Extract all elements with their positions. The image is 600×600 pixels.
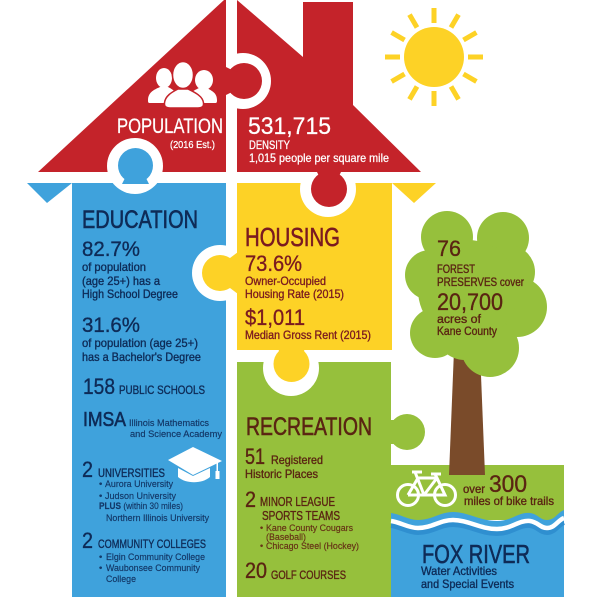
text: recreation: Kane County Cougars: [266, 523, 353, 533]
text: housing: $1,011: [245, 305, 305, 330]
text: education: 31.6%: [82, 314, 140, 337]
text: education: •: [99, 479, 102, 490]
panel: housing: [202, 161, 436, 382]
text: education: 2: [82, 528, 93, 553]
text: housing: [245, 222, 371, 342]
text: education: •: [99, 552, 102, 563]
text: education: 82.7%: [82, 238, 140, 261]
text: forest preserves: 20,700: [437, 289, 503, 316]
text: education: IMSA: [83, 409, 127, 431]
tree trunk: [449, 350, 485, 475]
text: education: Illinois Mathematics: [129, 418, 210, 428]
text: forest preserves: FOREST: [437, 264, 475, 276]
panel: fox river water: [391, 510, 564, 597]
text: density: 531,715: [248, 113, 331, 140]
text: bike trails: [463, 471, 554, 508]
text: recreation: MINOR LEAGUE: [260, 495, 335, 509]
text: fox river: [421, 539, 530, 591]
text: density: DENSITY: [249, 138, 290, 152]
text: housing: HOUSING: [245, 222, 340, 252]
icon: bicycle: [398, 472, 456, 506]
text: recreation: Historic Places: [245, 467, 318, 481]
text: education: (age 25+) has a: [82, 274, 160, 288]
text: housing: Housing Rate (2015): [245, 287, 344, 301]
text: education: Aurora University: [105, 479, 173, 490]
panel: bike trails ground: [391, 465, 564, 520]
text: recreation: GOLF COURSES: [271, 568, 346, 582]
text: forest preserves: 76: [437, 236, 461, 261]
text: education: High School Degree: [82, 287, 178, 301]
text: fox river: FOX RIVER: [422, 539, 530, 569]
panel: density roof right: [215, 0, 421, 172]
text: bike trails: 300: [489, 471, 527, 498]
text: education: and Science Academy: [130, 429, 223, 439]
icon: graduation cap: [168, 447, 222, 482]
text: education: College: [106, 574, 136, 585]
text: recreation: Registered: [271, 453, 323, 467]
panel: recreation: [237, 340, 425, 597]
text: education: •: [99, 563, 102, 574]
text: housing: Median Gross Rent (2015): [245, 328, 371, 342]
text: recreation: 2: [245, 487, 256, 512]
text: education: PLUS (within 30 miles): [99, 501, 183, 512]
text: recreation: 51: [245, 444, 265, 469]
text: forest preserves: [437, 236, 524, 338]
blue knob into population: [118, 148, 153, 184]
text: recreation: •: [260, 523, 263, 533]
text: recreation: Chicago Steel (Hockey): [266, 541, 359, 551]
icon: people: [148, 62, 217, 108]
text: bike trails: miles of bike trails: [464, 494, 554, 508]
text: education: [82, 206, 223, 585]
text: forest preserves: acres of: [437, 314, 482, 326]
text: education: 158: [83, 374, 115, 399]
text: density: [248, 113, 389, 165]
text: education: Elgin Community College: [106, 552, 205, 563]
text: bike trails: over: [463, 482, 485, 496]
text: education: 2: [82, 457, 93, 482]
text: education: COMMUNITY COLLEGES: [98, 537, 206, 551]
text: population: (2016 Est.): [170, 140, 215, 151]
text: education: of population: [82, 260, 146, 274]
text: population: [117, 115, 223, 151]
text: education: PUBLIC SCHOOLS: [119, 383, 205, 397]
text: forest preserves: PRESERVES cover: [437, 277, 524, 289]
text: education: has a Bachelor's Degree: [82, 350, 201, 364]
text: education: EDUCATION: [82, 206, 198, 234]
text: education: Judson University: [105, 491, 176, 502]
text: recreation: 20: [245, 558, 267, 583]
tree canopy: [405, 211, 547, 377]
text: recreation: RECREATION: [246, 413, 372, 441]
text: housing: 73.6%: [245, 251, 302, 276]
text: fox river: and Special Events: [421, 577, 514, 591]
text: forest preserves: Kane County: [437, 326, 497, 338]
text: education: Waubonsee Community: [106, 563, 200, 574]
panel: education: [27, 183, 248, 597]
text: education: •: [99, 491, 102, 502]
text: education: Northern Illinois University: [106, 513, 209, 524]
text: density: 1,015 people per square mile: [249, 151, 389, 165]
icon: sun: [385, 8, 483, 106]
text: recreation: •: [260, 541, 263, 551]
text: education: of population (age 25+): [82, 336, 198, 350]
red knob into housing: [311, 170, 347, 207]
panel: population roof left: [38, 0, 262, 194]
text: recreation: (Baseball): [266, 532, 306, 542]
text: education: UNIVERSITIES: [98, 466, 165, 480]
text: housing: Owner-Occupied: [245, 274, 326, 288]
text: population: POPULATION: [117, 115, 223, 138]
text: recreation: [245, 413, 372, 583]
text: recreation: SPORTS TEAMS: [262, 509, 340, 523]
text: fox river: Water Activities: [421, 564, 497, 578]
